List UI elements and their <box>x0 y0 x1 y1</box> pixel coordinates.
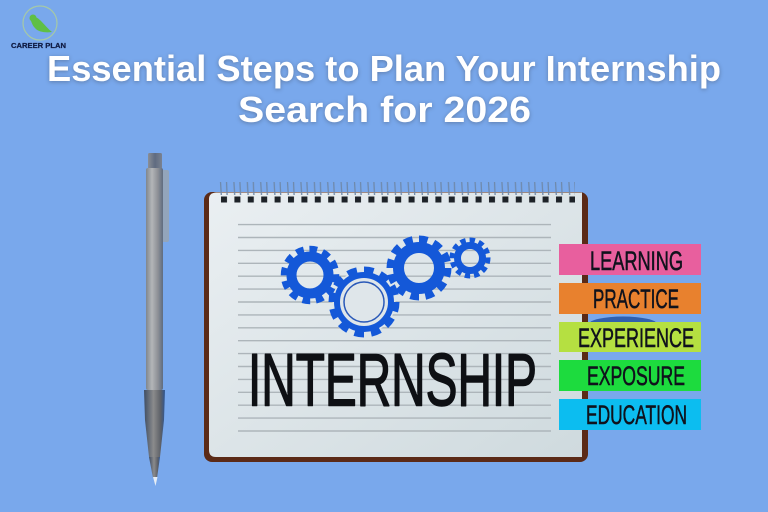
gear 1 <box>284 249 336 301</box>
label: LEARNING <box>559 244 701 276</box>
gear 3 <box>390 239 448 297</box>
icon: gears <box>284 239 488 334</box>
title: Search for 2026 <box>238 89 531 130</box>
label: EDUCATION: EDUCATION <box>586 400 687 430</box>
label: EDUCATION <box>559 399 701 430</box>
label: PRACTICE: PRACTICE <box>593 284 679 314</box>
logo: Career Plan: CAREER PLAN <box>11 41 66 50</box>
ruled lines <box>238 225 551 431</box>
label: EXPERIENCE <box>559 322 701 353</box>
label: EXPOSURE <box>559 360 701 391</box>
notebook page <box>209 192 582 457</box>
label: LEARNING: LEARNING <box>590 246 683 276</box>
gear 4 <box>452 240 488 276</box>
notebook cover <box>204 192 588 462</box>
logo: Career Plan <box>11 6 66 50</box>
label: EXPOSURE: EXPOSURE <box>587 361 685 391</box>
label: PRACTICE <box>559 283 701 314</box>
label: EXPERIENCE: EXPERIENCE <box>578 323 694 353</box>
dark blue shape behind labels <box>589 316 657 332</box>
icon: pen <box>144 153 169 486</box>
gear 2 <box>332 270 396 334</box>
spiral binding <box>218 180 575 206</box>
notebook <box>204 180 588 462</box>
heading: INTERNSHIP: INTERNSHIP <box>248 338 537 422</box>
title: Essential Steps to Plan Your Internship <box>47 48 721 89</box>
title <box>47 48 721 130</box>
